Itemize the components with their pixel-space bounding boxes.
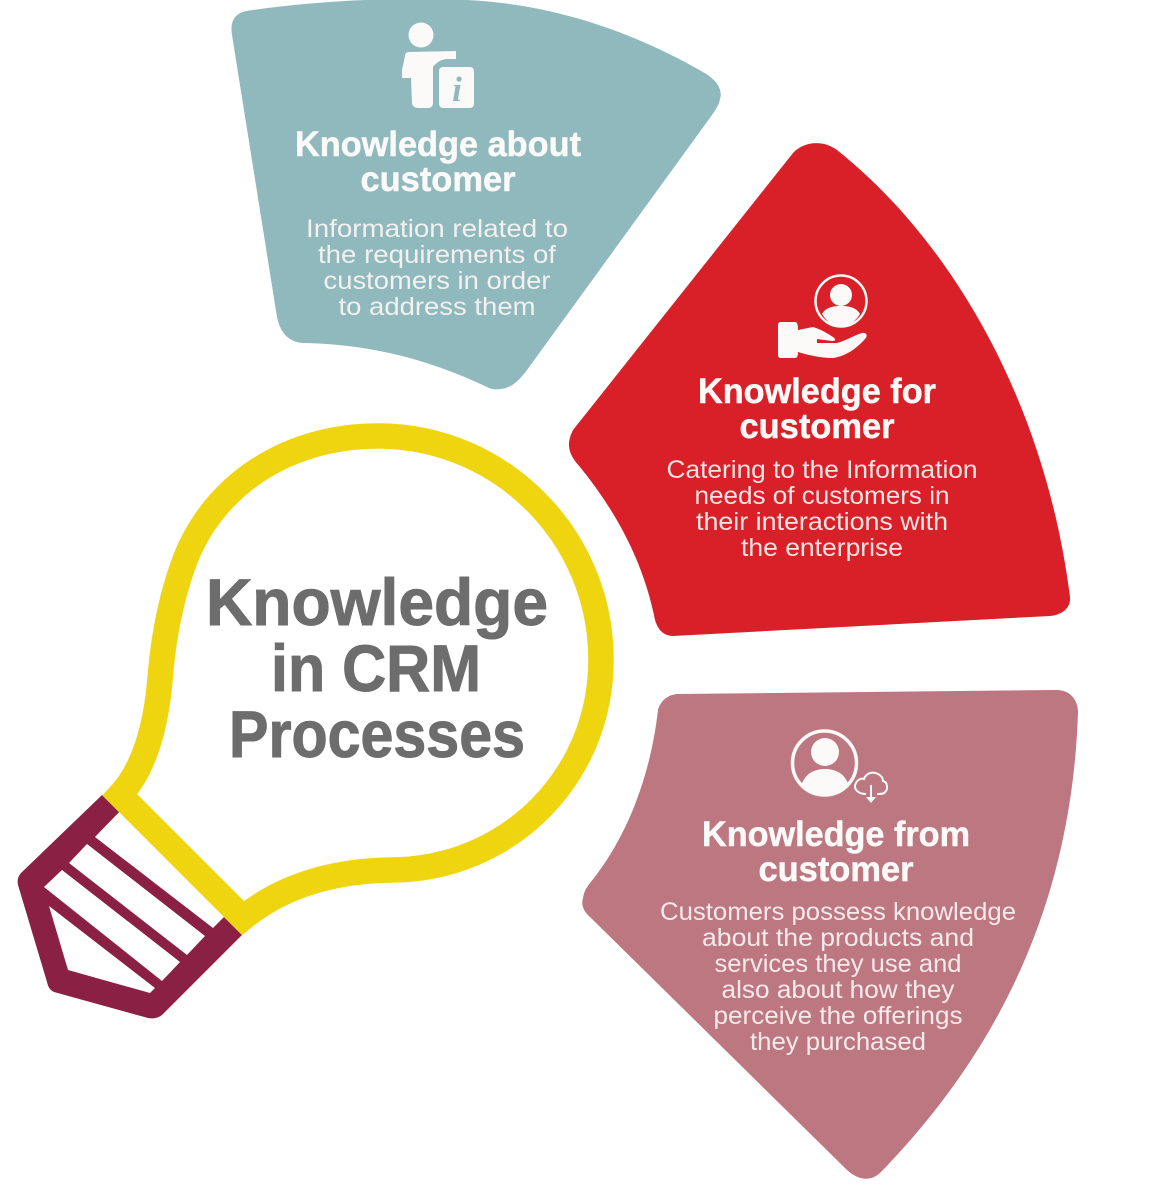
icon: person with info sign bbox=[402, 22, 474, 109]
text: knowledge from customer description: Customers possess knowledge bbox=[660, 898, 1016, 926]
text: knowledge from customer description bbox=[660, 898, 1016, 1056]
text: knowledge for customer description: needs of customers in bbox=[694, 482, 950, 510]
text: knowledge about customer description bbox=[306, 215, 568, 321]
title: Processes bbox=[229, 697, 525, 771]
heading: knowledge about customer: Knowledge about bbox=[295, 125, 581, 164]
panel: knowledge about customer bbox=[232, 0, 721, 389]
text: knowledge from customer description: services they use and bbox=[714, 950, 962, 978]
text: knowledge for customer description: Catering to the Information bbox=[666, 456, 978, 484]
text: knowledge from customer description: also about how they bbox=[722, 976, 955, 1004]
text: knowledge for customer description bbox=[666, 456, 978, 562]
text: knowledge for customer description: the enterprise bbox=[741, 534, 903, 562]
text: knowledge about customer description: Information related to bbox=[306, 215, 568, 243]
icon: person with info sign: i bbox=[452, 70, 462, 109]
text: knowledge from customer description: about the products and bbox=[702, 924, 974, 952]
panel: knowledge about customer: customer bbox=[360, 160, 516, 199]
text: knowledge from customer description: perceive the offerings bbox=[714, 1002, 962, 1030]
icon: hand holding person bbox=[778, 276, 867, 358]
text: knowledge from customer description: they purchased bbox=[750, 1028, 926, 1056]
title: in CRM bbox=[271, 631, 481, 705]
panel: knowledge for customer bbox=[569, 143, 1070, 636]
text: knowledge about customer description: to address them bbox=[338, 293, 536, 321]
light bulb bbox=[18, 436, 601, 1018]
title bbox=[206, 565, 548, 771]
bulb glass outline bbox=[120, 436, 601, 918]
bulb base bbox=[18, 795, 242, 1018]
icon: person with cloud download bbox=[792, 731, 887, 803]
text: knowledge about customer description: the requirements of bbox=[318, 241, 556, 269]
panel: knowledge for customer: customer bbox=[740, 407, 895, 446]
title: Knowledge bbox=[206, 565, 548, 639]
panel: knowledge from customer: customer bbox=[758, 850, 914, 889]
panel: knowledge from customer bbox=[582, 690, 1078, 1179]
text: knowledge about customer description: customers in order bbox=[324, 267, 550, 295]
text: knowledge for customer description: their interactions with bbox=[696, 508, 948, 536]
heading: knowledge from customer: Knowledge from bbox=[702, 815, 970, 854]
heading: knowledge for customer: Knowledge for bbox=[698, 372, 936, 411]
